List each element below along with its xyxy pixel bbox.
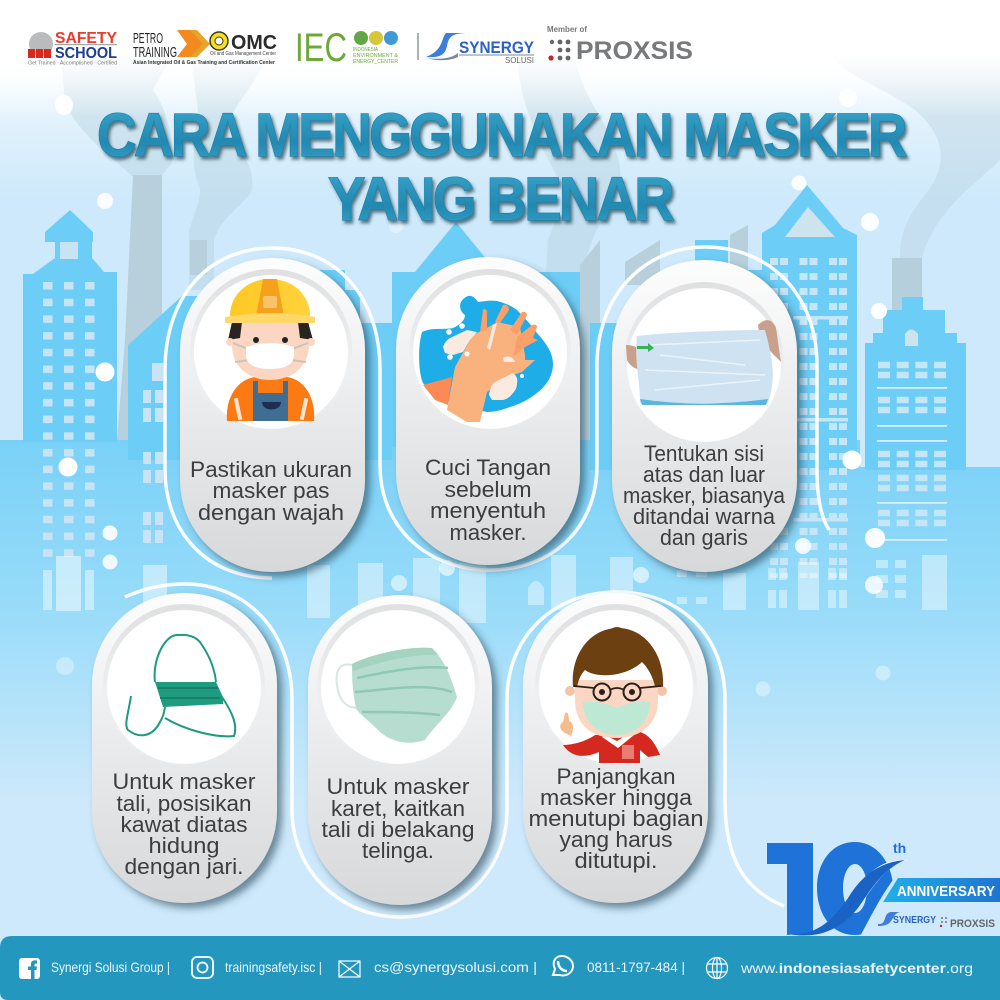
text: step 5: karet, kaitkan (331, 796, 465, 821)
logo: ISC safety school (28, 30, 117, 66)
card 4: tie mask (92, 593, 277, 903)
pale lower windows (307, 555, 947, 623)
text: step 6 (528, 764, 704, 873)
text: website: www. indonesiasafetycenter .org (740, 960, 973, 976)
white ribbon row one (165, 247, 829, 578)
logo: Synergy Solusi (426, 33, 534, 65)
white ribbon row two (125, 584, 784, 917)
text: anniversary: ANNIVERSARY (897, 884, 995, 900)
text: step 2 (425, 455, 551, 545)
card 6: extend mask (523, 593, 708, 903)
logo: Petro Training OMC: OMC (231, 32, 277, 54)
text: email: cs@synergysolusi.com | (374, 959, 537, 975)
icon: globe (706, 958, 728, 978)
text: step 6: ditutupi. (574, 848, 658, 873)
city skyline (0, 185, 1000, 940)
text: step 5: telinga. (362, 838, 434, 863)
text: step 4: Untuk masker (112, 769, 256, 794)
logo: ISC safety school: Get Trained · Accomplished · Certified (28, 60, 117, 66)
stepped tower right (865, 297, 966, 541)
text: step 5: tali di belakang (322, 817, 474, 842)
10th anniversary badge (767, 840, 1000, 940)
logo row (28, 25, 693, 70)
building left (23, 210, 117, 611)
text: step 6: yang harus (560, 827, 672, 852)
logo: IEC (295, 26, 399, 70)
text: step 1 (190, 457, 352, 525)
title: CARA MENGGUNAKAN MASKER (97, 101, 907, 169)
haze gradient (0, 55, 1000, 117)
small logos: PROXSIS (950, 918, 995, 930)
text: step 5 (322, 774, 474, 863)
icon: mail (339, 961, 360, 977)
logo: Member of Proxsis: Member of (547, 25, 587, 34)
white haze at top (0, 0, 1000, 56)
title (97, 101, 907, 233)
icon: worker with hard hat (225, 279, 315, 421)
small logos (878, 912, 995, 930)
logo: IEC: ENERGY_CENTER (353, 59, 398, 65)
text: step 6: Panjangkan (556, 764, 676, 789)
text: step 5: Untuk masker (326, 774, 470, 799)
text: step 4: hidung (148, 833, 220, 858)
logo: IEC: INDONESIA (353, 47, 379, 53)
text: step 1: masker pas (212, 478, 330, 503)
text: step 2: Cuci Tangan (425, 455, 551, 480)
text: step 3: ditandai warna (633, 504, 776, 529)
icon: facebook (19, 958, 40, 979)
logo: ISC safety school: SCHOOL (55, 45, 117, 62)
text: th: th (893, 840, 906, 856)
card 2: wash hands (396, 257, 580, 565)
text: step 6: menutupi bagian (528, 806, 704, 831)
icon: whatsapp (553, 956, 573, 975)
photo: blue surgical mask held in hands (626, 320, 781, 405)
card 1: fit (180, 258, 365, 572)
text: step 3 (623, 441, 786, 550)
logo: Petro Training OMC: PETRO (133, 30, 163, 47)
logo: Petro Training OMC (133, 30, 277, 66)
logo: Synergy Solusi: SYNERGY (459, 39, 534, 57)
icon: washing hands (419, 296, 553, 422)
text: step 3: dan garis (660, 525, 748, 550)
floating bubbles (55, 89, 890, 696)
text: step 2: menyentuh (430, 498, 546, 523)
logo: IEC: ENVIRONMENT & (353, 53, 399, 59)
text: step 3: atas dan luar (643, 462, 765, 487)
photo: green surgical mask (337, 648, 457, 743)
photo: green tie mask (126, 635, 235, 736)
text: step 6: masker hingga (540, 785, 693, 810)
logo: Petro Training OMC: TRAINING (133, 44, 177, 61)
logo: Petro Training OMC: Asian Integrated Oil & Gas Training and Certification Center (133, 60, 275, 66)
text: phone: 0811-1797-484 | (587, 959, 685, 975)
icon: woman with glasses and mask (560, 627, 667, 763)
text: facebook: Synergi Solusi Group | (51, 959, 170, 975)
text: step 3: masker, biasanya (623, 483, 786, 508)
text: step 2: masker. (450, 520, 526, 545)
central tower (392, 222, 580, 447)
text: instagram: trainingsafety.isc | (225, 959, 322, 975)
icon: instagram (192, 957, 213, 978)
footer bar (0, 936, 1000, 1000)
text: step 4: tali, posisikan (116, 791, 251, 816)
text: step 1: dengan wajah (198, 500, 344, 525)
anniversary band (883, 878, 1000, 902)
tower behind card three (590, 240, 762, 470)
small logos: SYNERGY (893, 914, 936, 926)
logo: Synergy Solusi: SOLUSI (505, 56, 534, 65)
logo: Member of Proxsis (547, 25, 693, 65)
smoke and chimneys (60, 50, 1000, 496)
text: step 3: Tentukan sisi (644, 441, 764, 466)
logo: IEC: IEC (295, 26, 347, 70)
card 5: elastic mask (308, 595, 492, 905)
text: step 4: dengan jari. (124, 854, 244, 879)
logo: ISC safety school: SAFETY (55, 30, 117, 47)
text: step 2: sebelum (444, 477, 532, 502)
card 3: mask sides (612, 260, 797, 572)
building second (128, 270, 392, 607)
logo: Member of Proxsis: PROXSIS (576, 37, 693, 65)
ground band (0, 440, 1000, 940)
house tower (762, 185, 857, 578)
text: step 4: kawat diatas (120, 812, 248, 837)
logo: Petro Training OMC: Oil and Gas Management Center (210, 51, 276, 57)
title: YANG BENAR (328, 165, 674, 233)
text: step 1: Pastikan ukuran (190, 457, 352, 482)
text: step 4 (112, 769, 256, 879)
